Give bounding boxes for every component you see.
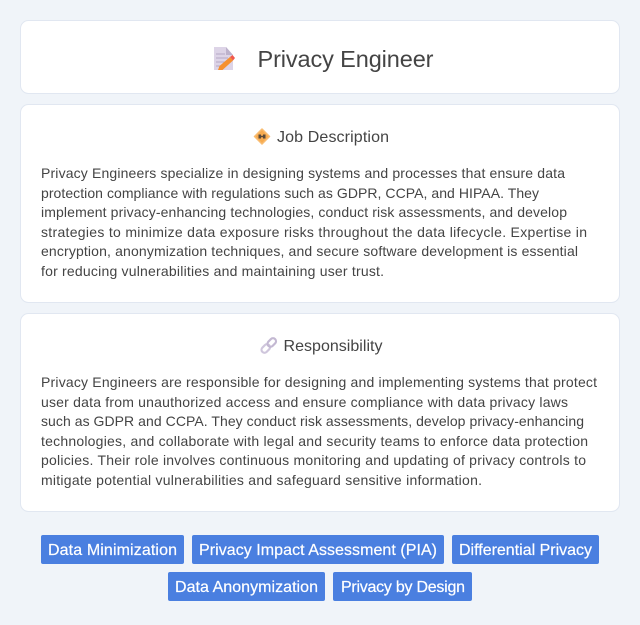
text block: job description: strategies to minimize data exposure risks throughout the data lifecycle. Expertise in [41, 224, 587, 240]
panel: job description [20, 104, 620, 302]
heading: responsibility: Responsibility [284, 338, 382, 355]
text block: job description: implement privacy-enhancing technologies, conduct risk assessments, and develop [41, 204, 567, 220]
tag: privacy impact assessment: Privacy Impact Assessment (PIA) [199, 542, 437, 559]
title: Privacy Engineer [258, 46, 434, 72]
tag: data minimization: Data Minimization [48, 542, 177, 559]
panel: responsibility [20, 314, 620, 512]
heading: job description: Job Description [277, 129, 389, 146]
icon: chain link [260, 337, 277, 354]
text block: responsibility: technologies, and collaborate with legal and security teams to enforce data protection [41, 433, 588, 449]
tag: differential privacy: Differential Privacy [459, 542, 592, 559]
text block: responsibility: Privacy Engineers are responsible for designing and implementing systems that protect [41, 374, 597, 390]
text block: job description: protection compliance with regulations such as GDPR, CCPA, and HIPAA. They [41, 185, 539, 201]
text block: responsibility: user data from unauthorized access and ensure compliance with data privacy laws [41, 394, 568, 410]
tag: data anonymization: Data Anonymization [175, 579, 318, 596]
text block: job description: Privacy Engineers specialize in designing systems and processes that ensure data [41, 165, 565, 181]
tag: data anonymization [168, 572, 325, 601]
tag: differential privacy [452, 535, 599, 564]
text block: job description: encryption, anonymization techniques, and secure software development is essential [41, 243, 578, 259]
text block: responsibility [41, 374, 597, 488]
tag row [41, 535, 599, 601]
panel: title card [20, 20, 620, 94]
tag: privacy by design [333, 572, 472, 601]
text block: job description: for reducing vulnerabilities and maintaining user trust. [41, 263, 384, 279]
icon: diamond sign [254, 129, 270, 144]
tag: privacy by design: Privacy by Design [341, 579, 465, 596]
icon: document with pencil [214, 47, 235, 70]
tag: data minimization [41, 535, 184, 564]
text block: responsibility: mitigate potential vulnerabilities and safeguard sensitive information. [41, 472, 482, 488]
tag: privacy impact assessment [192, 535, 444, 564]
text block: job description [41, 165, 587, 279]
text block: responsibility: such as GDPR and CCPA. They conduct risk assessments, develop privacy-enhancing [41, 413, 584, 429]
text block: responsibility: policies. Their role involves continuous monitoring and updating of privacy controls to [41, 452, 586, 468]
